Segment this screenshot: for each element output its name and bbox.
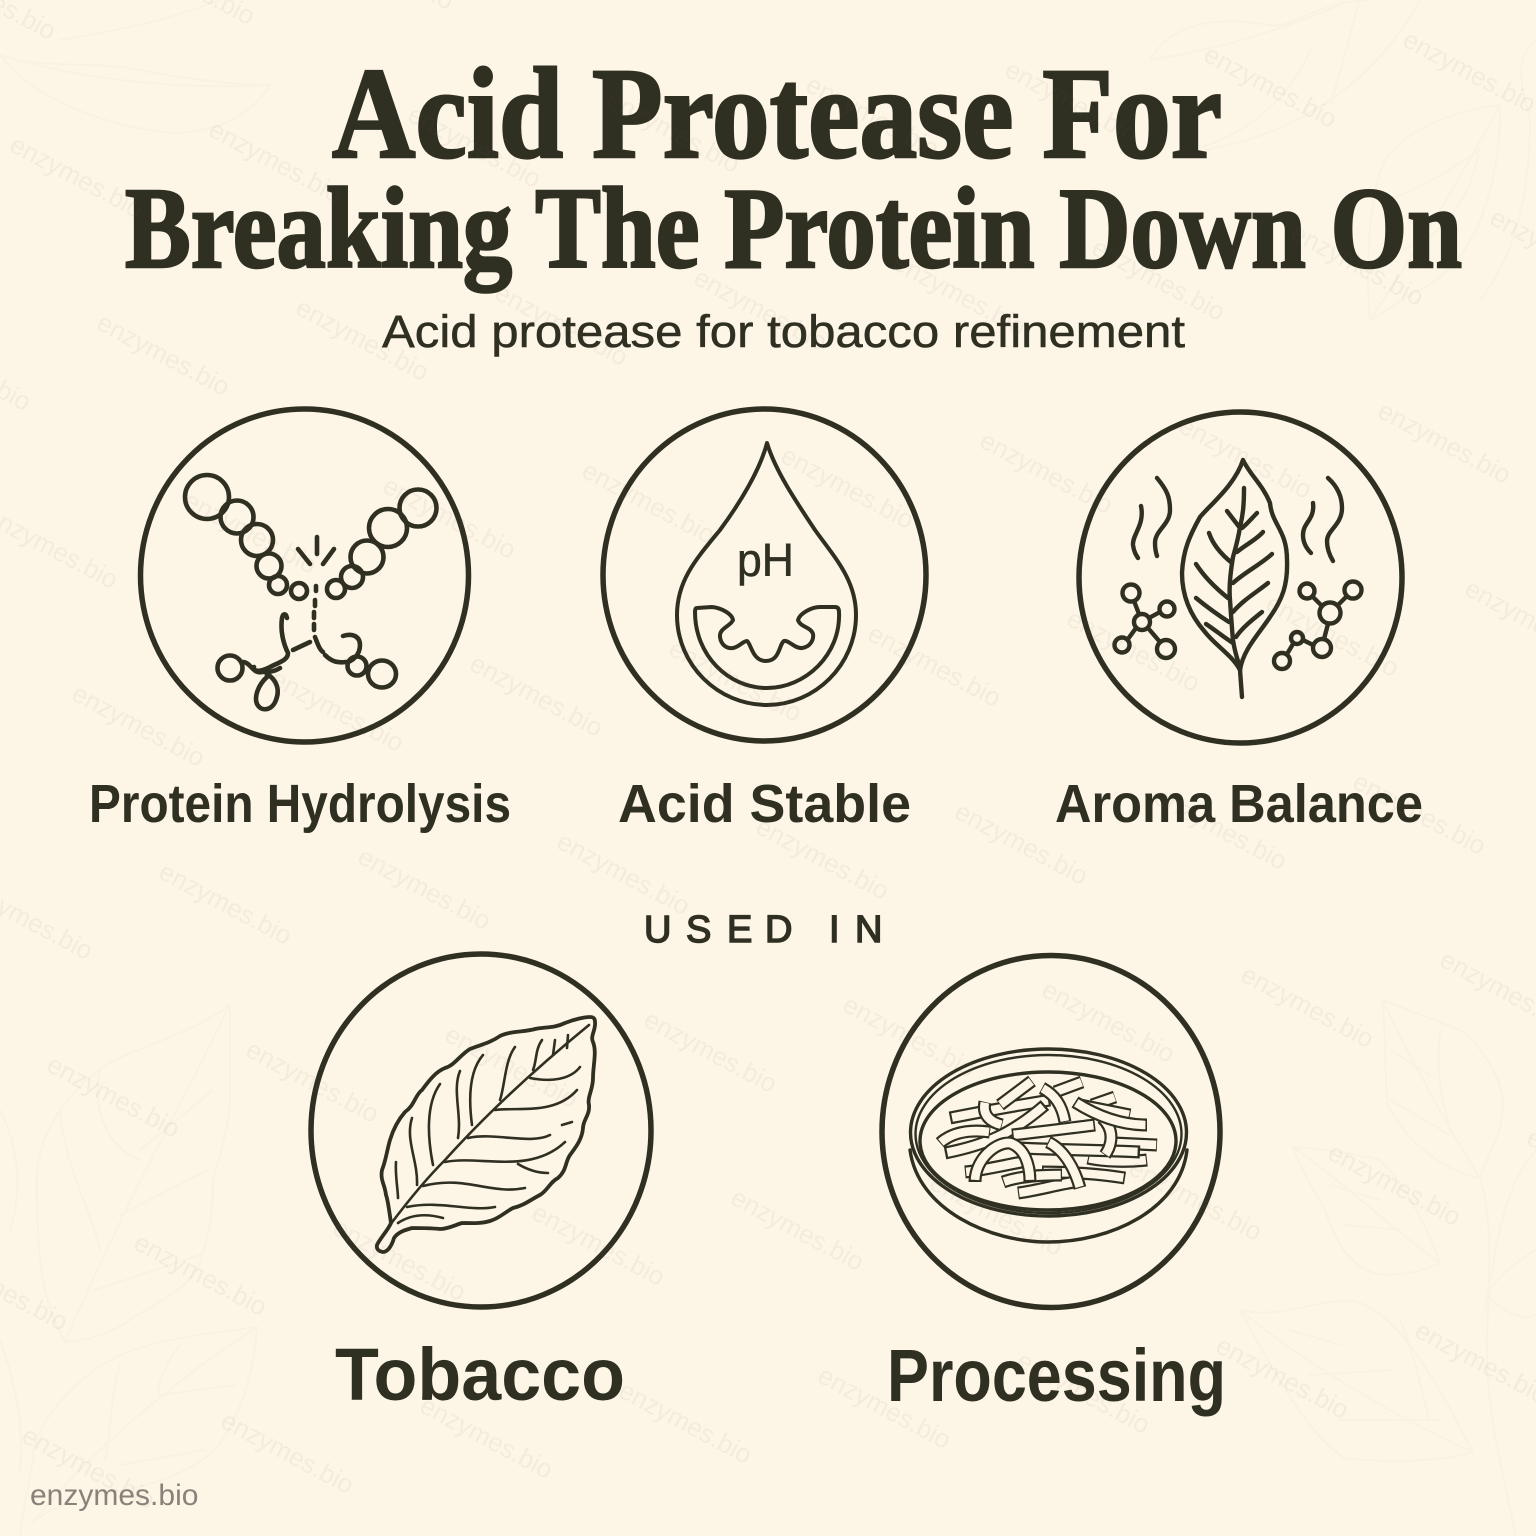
repeated diagonal watermark: enzymes.bio (291, 292, 434, 387)
repeated diagonal watermark: enzymes.bio (129, 1227, 272, 1322)
repeated diagonal watermark: enzymes.bio (241, 1034, 384, 1129)
subtitle: Acid protease for tobacco refinement (382, 306, 1186, 357)
repeated diagonal watermark: enzymes.bio (751, 811, 894, 906)
repeated diagonal watermark: enzymes.bio (950, 796, 1093, 891)
repeated diagonal watermark: enzymes.bio (403, 99, 546, 194)
repeated diagonal watermark: enzymes.bio (1373, 395, 1516, 490)
repeated diagonal watermark: enzymes.bio (1348, 766, 1491, 861)
repeated diagonal watermark: enzymes.bio (776, 440, 919, 535)
label: processing: Processing (887, 1334, 1226, 1417)
repeated diagonal watermark: enzymes.bio (378, 470, 521, 565)
repeated diagonal watermark: enzymes.bio (838, 989, 981, 1084)
icon: processing dish with shredded tobacco (882, 956, 1220, 1308)
repeated diagonal watermark: enzymes.bio (1000, 54, 1143, 149)
repeated diagonal watermark: enzymes.bio (726, 1182, 869, 1277)
title (125, 42, 1462, 293)
label: protein hydrolysis: Protein Hydrolysis (89, 774, 511, 834)
repeated diagonal watermark: enzymes.bio (1012, 1345, 1155, 1440)
repeated diagonal watermark: enzymes.bio (527, 1197, 670, 1292)
repeated diagonal watermark: enzymes.bio (5, 129, 148, 224)
repeated diagonal watermark: enzymes.bio (1037, 974, 1180, 1069)
repeated diagonal watermark: enzymes.bio (415, 1390, 558, 1485)
repeated diagonal watermark: enzymes.bio (925, 1167, 1068, 1262)
repeated diagonal watermark: enzymes.bio (440, 1019, 583, 1114)
footer brand mark: enzymes.bio (30, 1479, 198, 1512)
icon: acid stable drop (603, 409, 926, 741)
icon: acid stable drop: pH (737, 534, 794, 586)
repeated diagonal watermark: enzymes.bio (639, 1004, 782, 1099)
repeated diagonal watermark: enzymes.bio (67, 678, 210, 773)
repeated diagonal watermark: enzymes.bio (975, 425, 1118, 520)
label: acid stable: Acid Stable (618, 774, 911, 834)
repeated diagonal watermark: enzymes.bio (689, 262, 832, 357)
repeated diagonal watermark: enzymes.bio (1124, 1152, 1267, 1247)
repeated diagonal watermark: enzymes.bio (1211, 1330, 1354, 1425)
repeated diagonal watermark: enzymes.bio (1087, 232, 1230, 327)
repeated diagonal watermark: enzymes.bio (1199, 39, 1342, 134)
repeated diagonal watermark: enzymes.bio (42, 1049, 185, 1144)
repeated diagonal watermark: enzymes.bio (328, 1212, 471, 1307)
repeated diagonal watermark: enzymes.bio (801, 69, 944, 164)
label: tobacco: Tobacco (335, 1333, 625, 1416)
icon: aroma balance leaf and molecules (1079, 412, 1402, 743)
repeated diagonal watermark: enzymes.bio (465, 648, 608, 743)
repeated diagonal watermark: enzymes.bio (154, 856, 297, 951)
repeated diagonal watermark: enzymes.bio (1323, 1137, 1466, 1232)
repeated diagonal watermark: enzymes.bio (602, 84, 745, 179)
repeated diagonal watermark: enzymes.bio (577, 455, 720, 550)
repeated diagonal watermark: enzymes.bio (664, 633, 807, 728)
repeated diagonal watermark: enzymes.bio (353, 841, 496, 936)
repeated diagonal watermark: enzymes.bio (1062, 603, 1205, 698)
repeated diagonal watermark: enzymes.bio (92, 307, 235, 402)
repeated diagonal watermark: enzymes.bio (204, 114, 347, 209)
repeated diagonal watermark: enzymes.bio (1286, 217, 1429, 312)
repeated diagonal watermark: enzymes.bio (888, 247, 1031, 342)
repeated diagonal watermark: enzymes.bio (216, 1405, 359, 1500)
heading: used in: USEDIN (644, 909, 882, 951)
title: Acid Protease For (332, 42, 1222, 186)
icon: tobacco leaf (311, 954, 651, 1307)
repeated diagonal watermark: enzymes.bio (1261, 588, 1404, 683)
repeated diagonal watermark: enzymes.bio (490, 277, 633, 372)
repeated diagonal watermark: enzymes.bio (1236, 959, 1379, 1054)
icon: protein hydrolysis (140, 409, 468, 742)
repeated diagonal watermark: enzymes.bio (17, 1420, 160, 1515)
repeated diagonal watermark: enzymes.bio (1149, 781, 1292, 876)
repeated diagonal watermark: enzymes.bio (266, 663, 409, 758)
repeated diagonal watermark: enzymes.bio (863, 618, 1006, 713)
label: aroma balance: Aroma Balance (1055, 774, 1423, 834)
repeated diagonal watermark: enzymes.bio (1174, 410, 1317, 505)
repeated diagonal watermark: enzymes.bio (179, 485, 322, 580)
repeated diagonal watermark: enzymes.bio (614, 1375, 757, 1470)
repeated diagonal watermark: enzymes.bio (552, 826, 695, 921)
repeated diagonal watermark: enzymes.bio (813, 1360, 956, 1455)
